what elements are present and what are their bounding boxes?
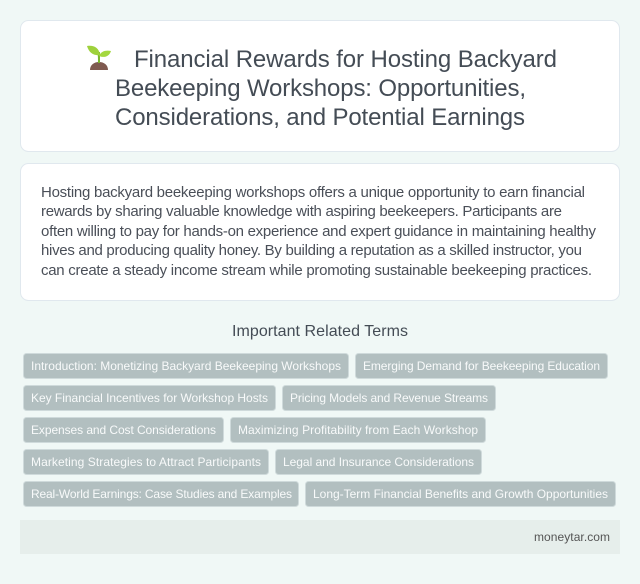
title text: Financial Rewards for Hosting Backyard: [134, 46, 557, 73]
heading: related terms: Important Related Terms: [232, 323, 408, 340]
tag: [24, 386, 276, 410]
tag: [24, 482, 298, 506]
icon: seedling: [87, 46, 111, 70]
tag: [356, 354, 608, 378]
tag: [282, 386, 496, 410]
tag: Marketing Strategies to Attract Participants: [31, 455, 261, 469]
tag: Long-Term Financial Benefits and Growth Opportunities: [313, 487, 608, 501]
paragraph text: rewards by sharing valuable knowledge with aspiring beekeepers. Participants are: [41, 203, 562, 220]
paragraph text: Hosting backyard beekeeping workshops offers a unique opportunity to earn financial: [41, 184, 585, 201]
tag: [24, 450, 268, 474]
tag: Pricing Models and Revenue Streams: [290, 391, 488, 405]
paragraph text: can create a steady income stream while promoting sustainable beekeeping practices.: [41, 262, 592, 279]
tag: [24, 418, 224, 442]
title text: [115, 46, 557, 131]
title text: Beekeeping Workshops: Opportunities,: [115, 75, 526, 102]
footer source text: moneytar.com: [534, 530, 610, 544]
title text: Considerations, and Potential Earnings: [115, 104, 525, 131]
tag: Legal and Insurance Considerations: [283, 455, 474, 469]
paragraph text: [41, 184, 596, 279]
tags: related terms: [24, 354, 616, 506]
tag: Emerging Demand for Beekeeping Education: [363, 359, 600, 373]
tag: Key Financial Incentives for Workshop Hosts: [31, 391, 268, 405]
tag: [24, 354, 348, 378]
tag: [276, 450, 482, 474]
panel: introduction paragraph: [20, 164, 620, 300]
tag: [230, 418, 486, 442]
tag: Maximizing Profitability from Each Workshop: [238, 423, 478, 437]
tag: [306, 482, 616, 506]
panel: title card: [20, 20, 620, 152]
paragraph text: often willing to pay for hands-on experience and expert guidance in maintaining healthy: [41, 223, 596, 240]
tag: Real-World Earnings: Case Studies and Examples: [31, 487, 292, 501]
tag: Expenses and Cost Considerations: [31, 423, 216, 437]
tag: Introduction: Monetizing Backyard Beekeeping Workshops: [31, 359, 341, 373]
footer: [20, 520, 620, 554]
paragraph text: hives and producing quality honey. By building a reputation as a skilled instructor, you: [41, 242, 582, 259]
